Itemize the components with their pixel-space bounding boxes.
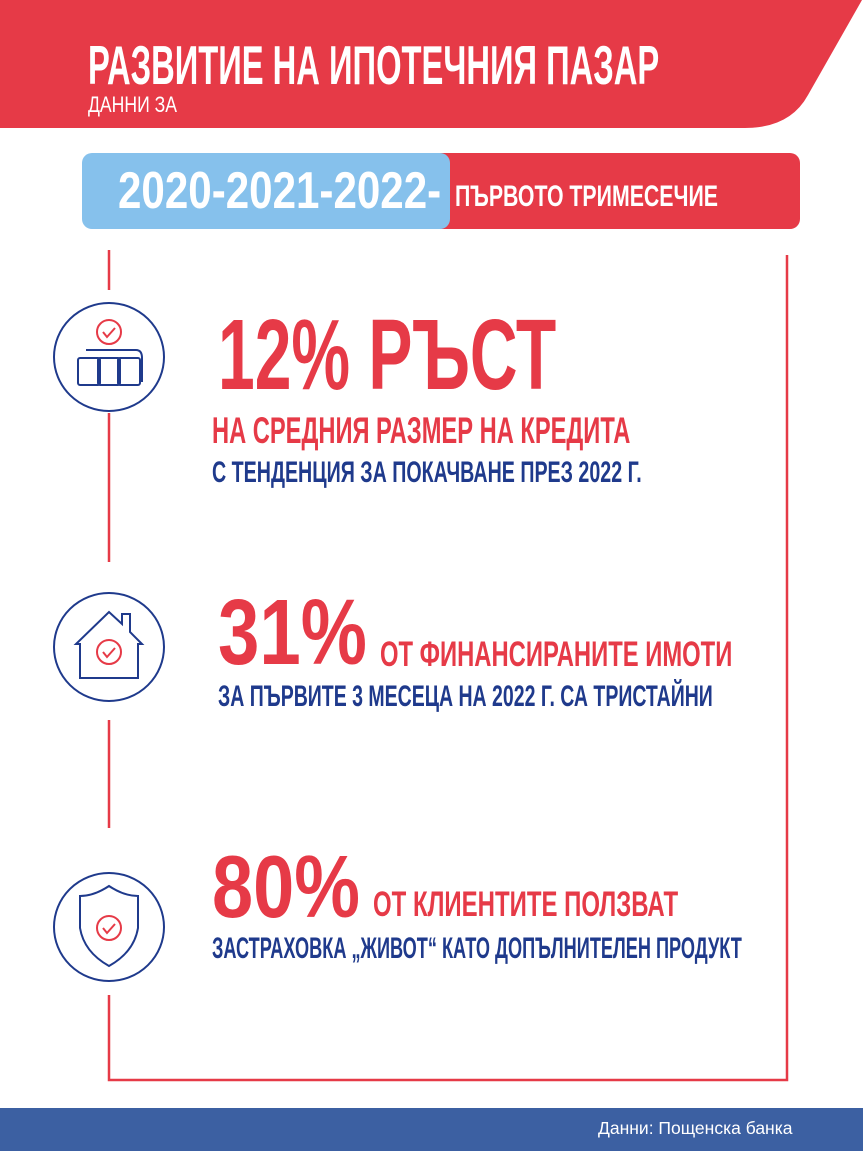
stat 1 headline: 12% РЪСТ (218, 299, 556, 411)
stat 3 red text: ОТ КЛИЕНТИТЕ ПОЛЗВАТ (373, 885, 678, 924)
stat 2 red text: ОТ ФИНАНСИРАНИТЕ ИМОТИ (380, 635, 732, 674)
period bar (82, 153, 800, 229)
stat 2 number: 31% (218, 580, 367, 684)
stat 2 blue text: ЗА ПЪРВИТЕ 3 МЕСЕЦА НА 2022 Г. СА ТРИСТАЙНИ (218, 680, 713, 713)
subtitle: ДАННИ ЗА (88, 92, 177, 117)
stat 1 blue text: С ТЕНДЕНЦИЯ ЗА ПОКАЧВАНЕ ПРЕЗ 2022 Г. (212, 456, 642, 489)
stat 3 blue text: ЗАСТРАХОВКА „ЖИВОТ“ КАТО ДОПЪЛНИТЕЛЕН ПРОДУКТ (212, 932, 742, 965)
header band (0, 0, 862, 128)
source text: Данни: Пощенска банка (598, 1118, 792, 1138)
year text: 2020-2021-2022- (118, 162, 441, 220)
stat 3 number: 80% (212, 837, 360, 936)
quarter text: ПЪРВОТО ТРИМЕСЕЧИЕ (455, 180, 718, 213)
icon: money (53, 302, 165, 412)
title: РАЗВИТИЕ НА ИПОТЕЧНИЯ ПАЗАР (88, 34, 659, 96)
icon: shield (53, 872, 165, 982)
icon: house (53, 592, 165, 702)
stat 1 red text: НА СРЕДНИЯ РАЗМЕР НА КРЕДИТА (212, 410, 630, 451)
footer bar (0, 1108, 863, 1151)
